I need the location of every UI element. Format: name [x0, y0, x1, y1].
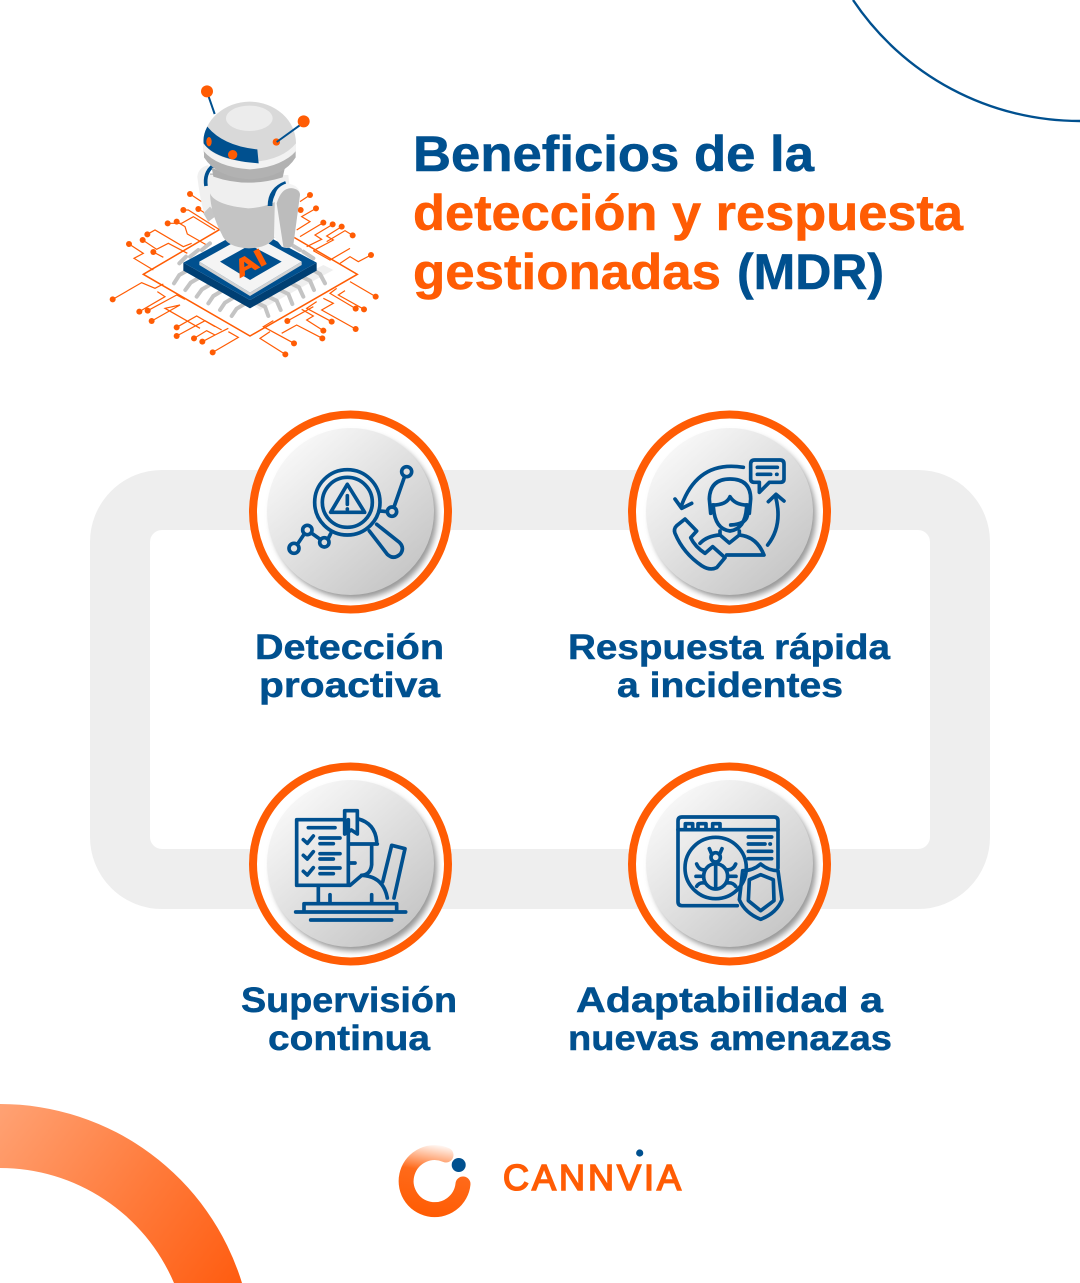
title: Beneficios de la [413, 126, 815, 182]
label: proactiva [259, 666, 441, 705]
label: nuevas amenazas [568, 1019, 892, 1058]
icon circle: checklist supervisor [249, 762, 452, 966]
label: a incidentes [617, 666, 843, 705]
logo: Cannvia [406, 1149, 681, 1210]
panel: respuesta rápida a incidentes [568, 410, 891, 705]
icon circle: magnifier alert [249, 410, 452, 614]
panel: supervisión continua [241, 762, 457, 1058]
title [413, 126, 964, 300]
label [241, 981, 457, 1058]
chip label: AI [230, 244, 271, 283]
panel: detección proactiva [249, 410, 452, 705]
logo mark [406, 1153, 466, 1210]
icon circle: call agent [628, 410, 831, 614]
label: Detección [255, 628, 444, 667]
label [568, 981, 892, 1058]
chip [174, 227, 333, 316]
circuit board traces [110, 191, 379, 357]
label [568, 628, 891, 705]
title: (MDR) [737, 244, 884, 300]
decorative arc: top right [853, 0, 1080, 121]
robot [197, 85, 310, 248]
icon circle: bug and shield window [628, 762, 831, 966]
label: Respuesta rápida [568, 628, 891, 667]
panel: adaptabilidad a nuevas amenazas [568, 762, 892, 1058]
label: continua [268, 1019, 431, 1058]
illustration: robot on AI chip [110, 85, 379, 357]
label [255, 628, 444, 705]
title: detección y respuesta [413, 185, 964, 241]
decorative arc: bottom left [0, 1104, 242, 1283]
wordmark: CANNVIA [503, 1157, 681, 1198]
title: gestionadas [413, 244, 721, 300]
label: Adaptabilidad a [576, 981, 884, 1020]
label: Supervisión [241, 981, 457, 1020]
connecting rounded frame [120, 500, 960, 879]
